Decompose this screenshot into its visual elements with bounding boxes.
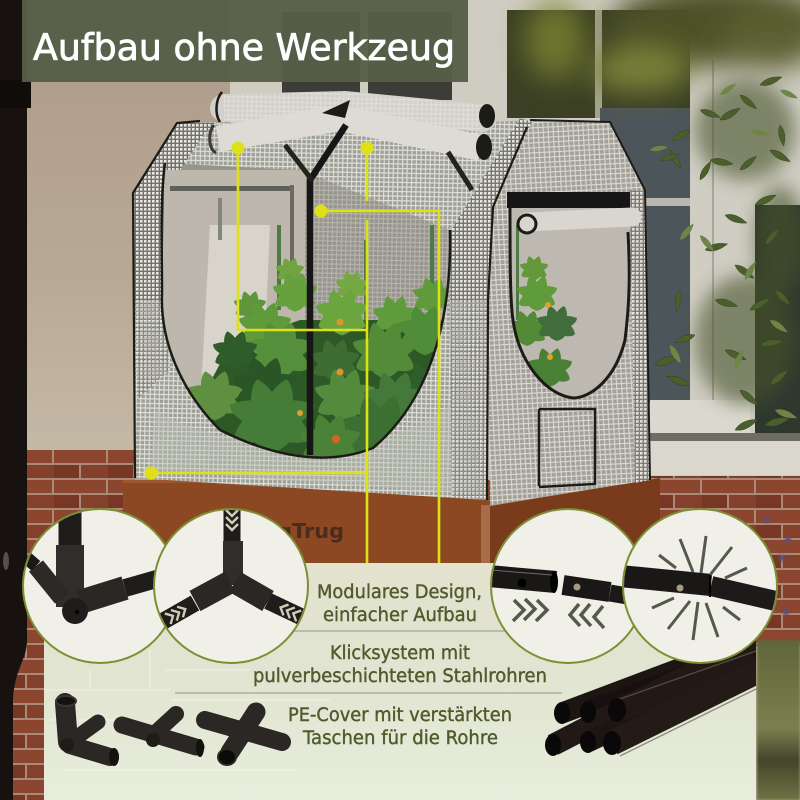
opening interior — [160, 160, 455, 467]
circle 3: tubes apart — [488, 509, 650, 663]
background: blurred foliage top right — [590, 0, 800, 92]
background: bricks — [0, 450, 800, 800]
opening zip outline — [162, 163, 450, 458]
internal steel frame — [310, 125, 346, 455]
chevrons — [165, 510, 301, 624]
panel: features — [44, 563, 756, 800]
cucumber plants — [187, 258, 453, 467]
text block: modular design: Modulares Design, — [317, 582, 482, 603]
circle 1: corner connector — [20, 505, 177, 663]
connector pieces — [56, 696, 282, 766]
rolled side cover — [518, 215, 632, 233]
text block: PE cover: PE-Cover mit verstärkten — [288, 705, 512, 726]
lavender flowers — [758, 517, 791, 615]
circle 2: three-way connector — [154, 505, 308, 663]
circle 4: tubes clicked — [620, 509, 780, 663]
text block: PE cover: Taschen für die Rohre — [302, 728, 498, 749]
arrows — [513, 599, 604, 628]
text block: modular design — [317, 582, 482, 626]
connector: three-way corner — [56, 696, 119, 766]
divider — [290, 630, 506, 632]
side pocket — [507, 192, 630, 208]
click rays — [652, 536, 747, 640]
wooden raised bed — [123, 478, 660, 563]
greenhouse side panel — [488, 120, 650, 505]
rolled-up roof cover — [210, 92, 495, 160]
yellow callout lines — [144, 142, 439, 563]
text block: click system: pulverbeschichteten Stahlrohren — [253, 666, 547, 687]
text block: click system — [253, 643, 547, 687]
text block: modular design: einfacher Aufbau — [323, 605, 477, 626]
text block: PE cover — [288, 705, 512, 749]
greenhouse back mesh — [165, 163, 450, 450]
brand on wood: VegTrug — [248, 519, 344, 543]
title: Aufbau ohne Werkzeug — [33, 26, 455, 69]
greenhouse front panel — [133, 118, 532, 500]
outer edge seam — [133, 121, 527, 500]
divider — [175, 692, 562, 694]
steel tube bundle — [545, 640, 756, 756]
text block: click system: Klicksystem mit — [330, 643, 470, 664]
small side window — [539, 409, 595, 487]
foliage: olive branches — [618, 74, 800, 433]
connector: cross piece — [205, 712, 282, 765]
background: wall — [0, 0, 260, 460]
connector: T piece — [122, 714, 204, 757]
greenhouse — [133, 92, 650, 505]
background: house windows — [230, 0, 800, 480]
foreground blur right — [757, 640, 800, 800]
background: drain pipe — [0, 0, 31, 800]
title banner — [22, 0, 468, 82]
